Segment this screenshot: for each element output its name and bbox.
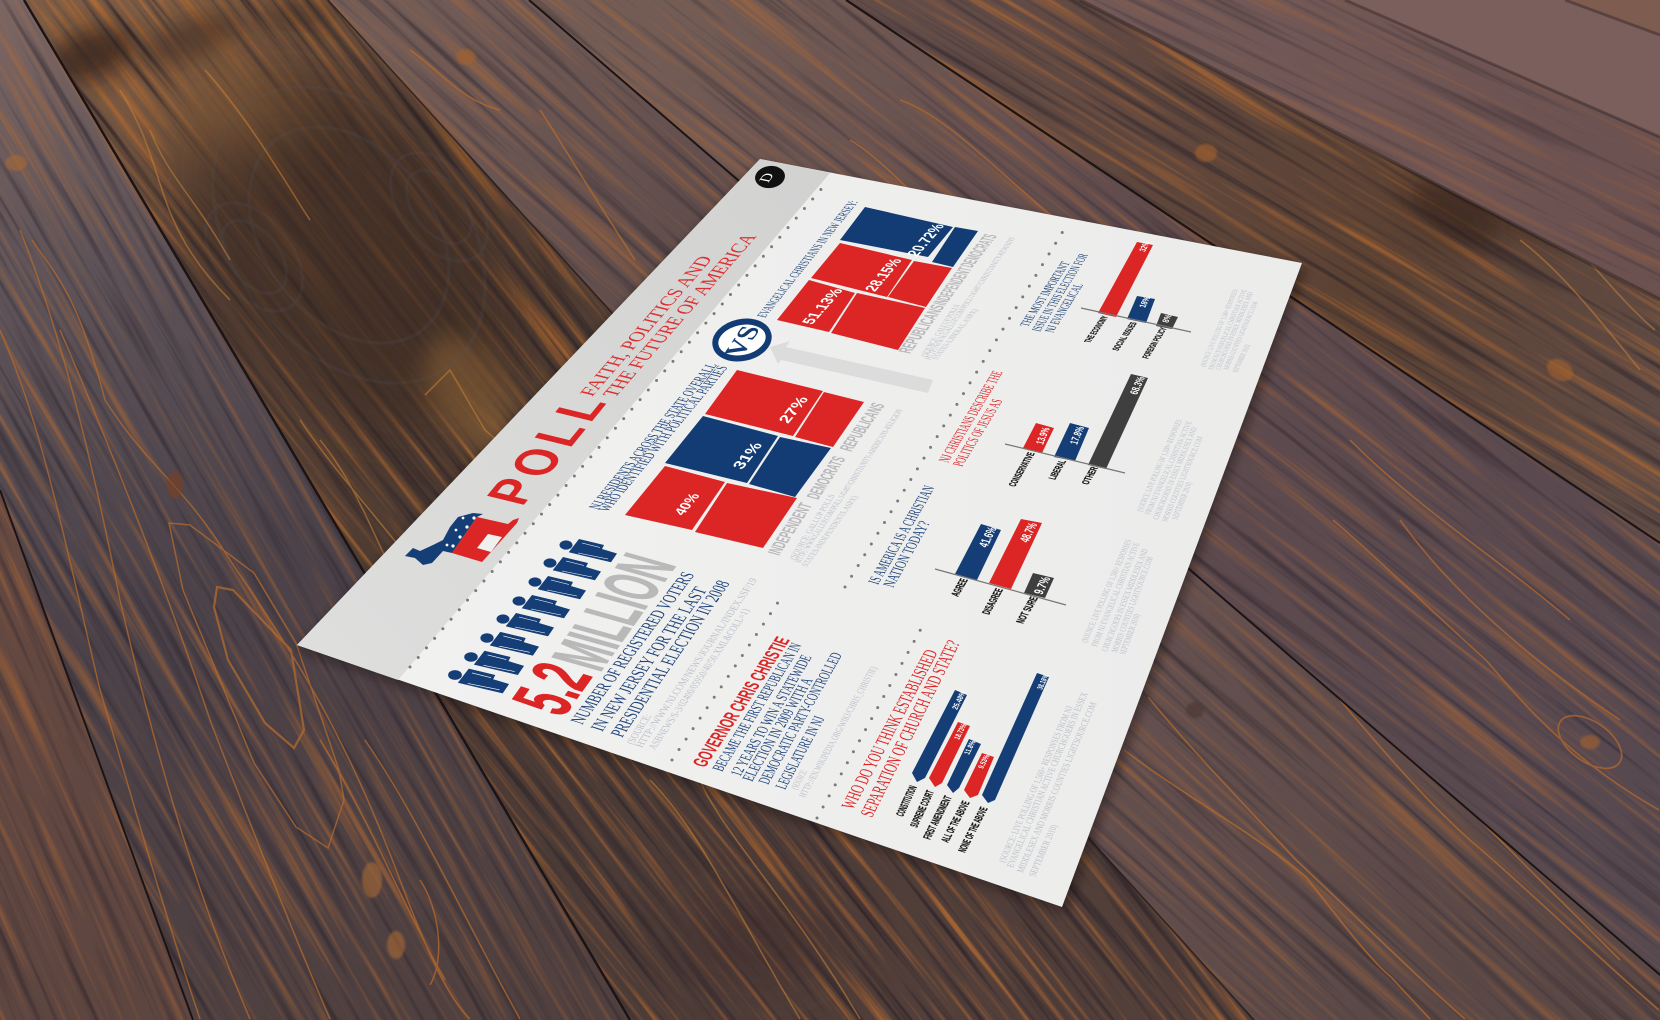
bar chart: church and state: 11.8%	[962, 740, 978, 756]
heading: politics of Jesus: POLITICS OF JESUS AS	[950, 398, 1007, 468]
treemap: NJ residents by party: DEMOCRATS	[803, 454, 850, 501]
big number: 5.2 million: 5.2	[494, 654, 609, 723]
bar chart: Christian nation: DISAGREE	[980, 587, 1006, 616]
heading: politics of Jesus	[936, 369, 1007, 468]
header band	[297, 159, 830, 680]
bar chart: Christian nation: 41.6%	[975, 525, 1000, 549]
source: politics of Jesus: (SOURCE: LIVE POLLING OF 1,500+ RESPONSES	[1134, 418, 1184, 512]
bar chart: politics of Jesus: 13.9%	[1034, 426, 1053, 446]
bar chart: most important issue: 18%	[1137, 296, 1152, 308]
bar chart: Christian nation: 48.7%	[1016, 521, 1040, 544]
source: politics of Jesus: FROM NJ EVANGELICAL CHRISTIAN ACTIVE	[1142, 420, 1194, 515]
bar chart: most important issue: THE ECONOMY	[1082, 315, 1110, 343]
source: evangelical Christians: STATES-LIBERAL.ASPX)	[929, 308, 980, 360]
treemap: evangelical Christians by party: 51.13%	[799, 287, 847, 326]
treemap: NJ residents by party: REPUBLICANS	[836, 401, 889, 453]
bar chart: church and state	[894, 673, 1051, 854]
heading: church and state: WHO DO YOU THINK ESTABLISHED	[838, 647, 943, 812]
logo badge: D	[756, 172, 779, 184]
text block: registered voters: (SOURCE:	[624, 713, 655, 746]
source: evangelical Christians	[918, 236, 1017, 360]
bar chart: church and state: 38.18%	[1035, 673, 1051, 691]
treemap: NJ residents by party: 27%	[776, 394, 813, 425]
bar chart: politics of Jesus: 17.8%	[1068, 425, 1087, 446]
source: church and state: EVANGELICAL CHRISTIAN ACTIVE CHURCHGOERS IN ESSEX	[1005, 691, 1091, 869]
source: church and state: (SOURCE: LIVE POLLING OF 1,500+ RESPONSES FROM NJ	[997, 705, 1076, 864]
treemap: NJ residents by party: INDEPENDENT	[764, 501, 816, 557]
bar chart: most important issue: 32%	[1137, 241, 1152, 252]
treemap: NJ residents by party: 40%	[672, 491, 704, 517]
heading: Christian nation: IS AMERICA IS A CHRISTIAN	[865, 484, 939, 586]
text block: registered voters: ASBNEWS/S-3/02400/05950/40/50.XML&COLL=1)	[646, 607, 753, 751]
source: Christian nation: SEPTEMBER 2010)	[1117, 613, 1142, 655]
poster sheet: DEMOCRATS	[956, 232, 1001, 269]
dotted dividers	[410, 187, 1068, 818]
heading: evangelical Christians: EVANGELICAL CHRISTIANS IN NEW JERSEY:	[753, 199, 861, 319]
poster shadow	[297, 164, 1306, 912]
source: most important issue: SEPTEMBER 2010)	[1230, 343, 1252, 373]
heading: Christian nation	[865, 484, 939, 589]
source: Christian nation: MORRIS COUNTIES LIGHTSOURCE.COM	[1109, 556, 1155, 653]
heading: NJ residents: NJ RESIDENTS ACROSS THE STATE OVERALL	[586, 362, 721, 511]
bar chart: politics of Jesus	[1005, 374, 1148, 488]
treemap: evangelical Christians by party: INDEPENDENT	[929, 266, 976, 307]
source: most important issue: (SOURCE: LIVE POLLING OF 1,500+ RESPONSES	[1198, 288, 1240, 367]
heading: most important issue	[1016, 252, 1091, 334]
treemap: evangelical Christians by party: 28.15%	[862, 257, 906, 293]
heading: most important issue: NJ EVANGELICAL	[1041, 282, 1086, 334]
bar chart: church and state: 9.53%	[976, 754, 992, 770]
heading: church and state: SEPARATION OF CHURCH AND STATE?	[857, 638, 965, 820]
treemap: evangelical Christians by party: REPUBLICANS	[894, 303, 949, 355]
text block: Governor Chris Christie: DEMOCRATIC PARTY-CONTROLLED	[756, 651, 846, 786]
big number: 5.2 million	[494, 546, 692, 723]
bar chart: church and state: 25.48%	[950, 690, 968, 711]
versus badge	[712, 317, 772, 363]
source: most important issue: MORRIS COUNTIES LIGHTSOURCE.COM	[1221, 301, 1260, 370]
text block: Governor Chris Christie: HTTP://EN.WIKIPEDIA.ORG/WIKI/CHRIS_CHRISTIE)	[797, 665, 880, 799]
bar chart: politics of Jesus: CONSERVATIVE	[1007, 451, 1038, 488]
source: Christian nation: FROM NJ EVANGELICAL CHRISTIAN ACTIVE	[1089, 541, 1142, 647]
bar chart: church and state: SUPREME COURT	[908, 789, 937, 829]
text block: registered voters: PRESIDENTIAL ELECTION IN 2008	[607, 578, 735, 740]
bar chart: politics of Jesus: 68.3%	[1128, 376, 1148, 396]
treemap: NJ residents by party: 31%	[730, 440, 767, 471]
heading: most important issue: ISSUE IN THIS ELECTION FOR	[1028, 252, 1091, 333]
source: politics of Jesus: MORRIS COUNTIES LIGHTSOURCE.COM	[1159, 435, 1205, 522]
heading: subtitle: FAITH, POLITICS AND	[576, 254, 718, 398]
bar chart: Christian nation	[935, 519, 1066, 625]
source: Christian nation: (SOURCE: LIVE POLLING OF 1,500+ RESPONSES	[1079, 538, 1134, 643]
bar chart: Christian nation: 9.7%	[1030, 575, 1054, 596]
source: NJ residents: STATES-INDEPENDENTS.ASPX)	[799, 495, 860, 568]
treemap: NJ residents by party	[625, 370, 889, 557]
source: evangelical Christians: HTTP://WWW.GALLUP.COM/POLL/145487/CHRISTIANITY-REMAINS	[922, 236, 1017, 360]
bar chart: most important issue: SOCIAL ISSUES	[1110, 321, 1139, 351]
heading: POLL: POLL	[474, 386, 623, 510]
source: Christian nation	[1079, 538, 1155, 655]
source: most important issue	[1198, 288, 1260, 373]
source: most important issue: FROM NJ EVANGELICAL CHRISTIAN ACTIVE	[1206, 288, 1249, 370]
logo badge	[754, 164, 786, 190]
source: politics of Jesus: CHURCHGOERS IN ESSEX MIDDLESEX AND	[1150, 426, 1199, 520]
bar chart: most important issue	[1081, 241, 1191, 359]
text block: registered voters: NUMBER OF REGISTERED VOTERS	[567, 570, 700, 727]
treemap: evangelical Christians by party: 20.72%	[904, 223, 949, 258]
heading: most important issue: THE MOST IMPORTANT	[1016, 260, 1073, 328]
source: politics of Jesus: SEPTEMBER 2010)	[1169, 481, 1194, 520]
source: evangelical Christians: (SOURCE: GALLUP POLLS	[918, 303, 962, 357]
bar chart: politics of Jesus: LIBERAL	[1047, 459, 1069, 481]
heading: Christian nation: NATION TODAY?	[880, 519, 934, 589]
heading: NJ residents	[586, 362, 732, 513]
people pictogram row	[448, 539, 617, 693]
text block: registered voters	[567, 570, 760, 751]
text block: Governor Chris Christie: 12 YEARS TO WIN A STATEWIDE	[728, 653, 816, 778]
arrow	[770, 341, 933, 393]
bar chart: politics of Jesus: OTHER	[1080, 466, 1101, 486]
icon: party mascots	[405, 513, 519, 565]
text block: Governor Chris Christie: (SOURCE:	[789, 768, 810, 791]
source: NJ residents: (SOURCE: GALLUP POLLS	[787, 493, 837, 561]
source: church and state	[997, 691, 1100, 878]
bar chart: church and state: FIRST AMENDMENT	[921, 794, 955, 841]
poster sheet: MILLION	[535, 546, 692, 677]
text block: Governor Chris Christie: GOVERNOR CHRIS CHRISTIE	[689, 635, 795, 770]
treemap: evangelical Christians by party	[777, 207, 1001, 355]
source: church and state: SEPTEMBER 2010)	[1027, 824, 1060, 878]
source: most important issue: CHURCHGOERS IN ESSEX MIDDLESEX AND	[1213, 291, 1255, 370]
heading: subtitle: THE FUTURE OF AMERICA	[599, 232, 762, 399]
bar chart: church and state: ALL OF THE ABOVE	[939, 800, 973, 844]
source: NJ residents: HTTP://WWW.GALLUP.COM/POLL/145487/CHRISTIANITY-AMERICANS-RELIGION	[792, 408, 905, 564]
source: politics of Jesus	[1134, 418, 1205, 522]
heading: church and state	[838, 638, 965, 820]
text block: Governor Chris Christie: LEGISLATURE IN NJ	[773, 714, 829, 791]
bar chart: Christian nation: NOT SURE	[1014, 596, 1041, 625]
bar chart: church and state: CONSTITUTION	[894, 784, 920, 818]
text block: Governor Chris Christie: ELECTION IN 2009 WITH A	[740, 676, 817, 783]
poster sheet	[297, 159, 1302, 907]
text block: registered voters: IN NEW JERSEY FOR THE LAST	[587, 585, 712, 734]
poster sheet: NJ CHRISTIANS DESCRIBE THE	[936, 369, 1007, 464]
source: church and state: MIDDLESEX AND MORRIS COUNTIES LIGHTSOURCE.COM	[1015, 701, 1100, 874]
text block: registered voters: HTTP://WWW.NJ.COM/NEWS/JOURNAL/INDEX.SSF/19	[633, 577, 760, 749]
source: Christian nation: CHURCHGOERS IN ESSEX MIDDLESEX AND	[1099, 548, 1150, 652]
bar chart: church and state: NONE OF THE ABOVE	[956, 806, 991, 854]
bar chart: most important issue: 8%	[1160, 313, 1174, 323]
bar chart: most important issue: FOREIGN POLICY	[1140, 327, 1169, 359]
text block: Governor Chris Christie: BECAME THE FIRST REPUBLICAN IN	[710, 641, 806, 773]
source: NJ residents	[787, 408, 905, 568]
bar chart: church and state: 18.73%	[952, 723, 969, 741]
paper	[297, 159, 1302, 907]
bar chart: Christian nation: AGREE	[949, 577, 971, 598]
heading: NJ residents: WHO IDENTIFIED WITH POLITICAL PARTIES	[596, 364, 732, 513]
versus badge: VS	[717, 323, 767, 359]
text block: Governor Chris Christie	[689, 635, 880, 799]
